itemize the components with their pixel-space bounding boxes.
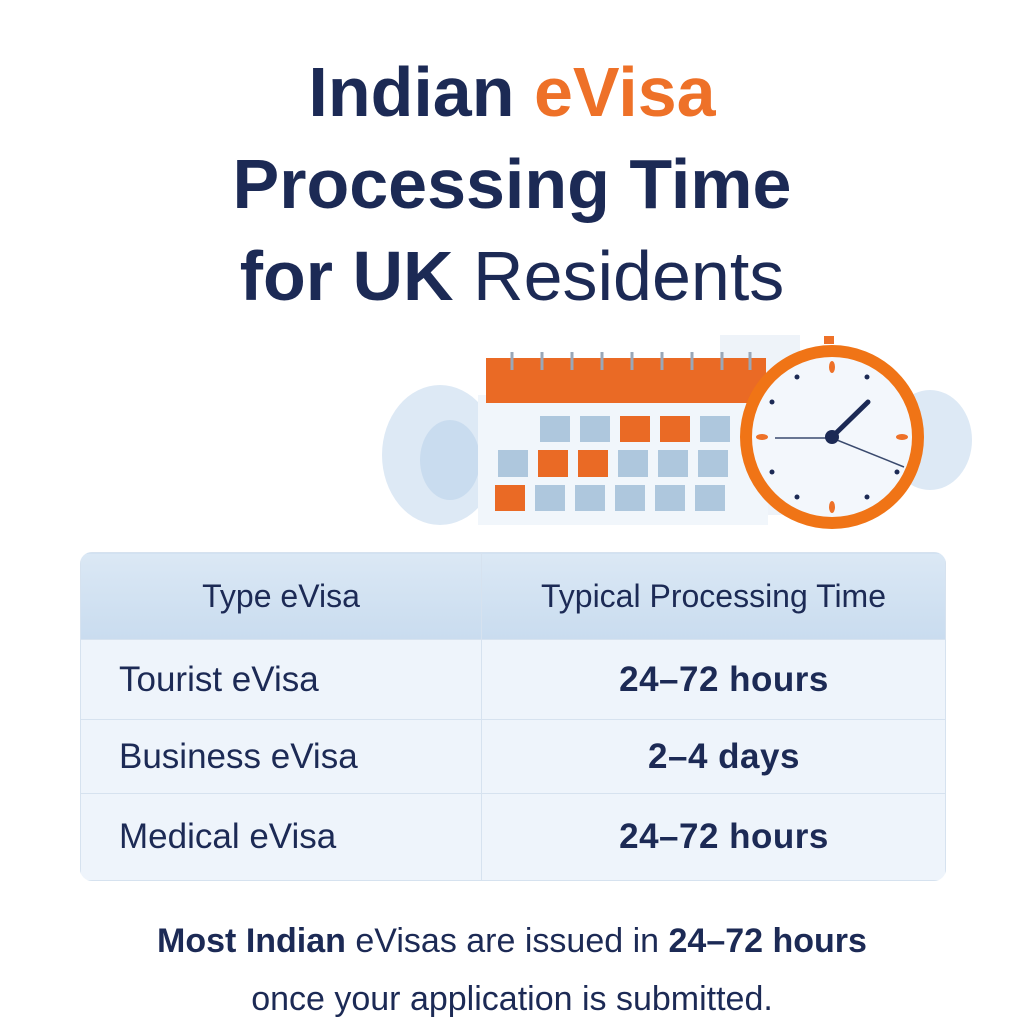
row: medical xyxy=(119,817,829,856)
title: for UK Residents xyxy=(240,237,784,315)
title: Processing Time xyxy=(233,145,791,223)
row: business xyxy=(119,736,800,776)
clock xyxy=(746,336,918,523)
footer note: Most Indian eVisas are issued in 24–72 hours xyxy=(157,922,867,960)
footer note xyxy=(157,922,867,1018)
title: Indian eVisa xyxy=(308,53,716,131)
footer note: once your application is submitted. xyxy=(251,980,773,1018)
calendar xyxy=(478,352,768,525)
table: processing times: Type eVisa xyxy=(202,578,360,614)
illustration: calendar and clock xyxy=(382,335,972,529)
row: tourist xyxy=(119,660,829,698)
row: medical: 24–72 hours xyxy=(619,817,829,856)
row: tourist: Tourist eVisa xyxy=(119,660,319,698)
table: processing times: Typical Processing Time xyxy=(541,578,886,614)
row: tourist: 24–72 hours xyxy=(619,660,829,698)
title xyxy=(233,53,791,315)
row: business: Business eVisa xyxy=(119,736,358,776)
row: business: 2–4 days xyxy=(648,736,800,776)
row: medical: Medical eVisa xyxy=(119,817,336,856)
table: processing times xyxy=(80,552,946,881)
